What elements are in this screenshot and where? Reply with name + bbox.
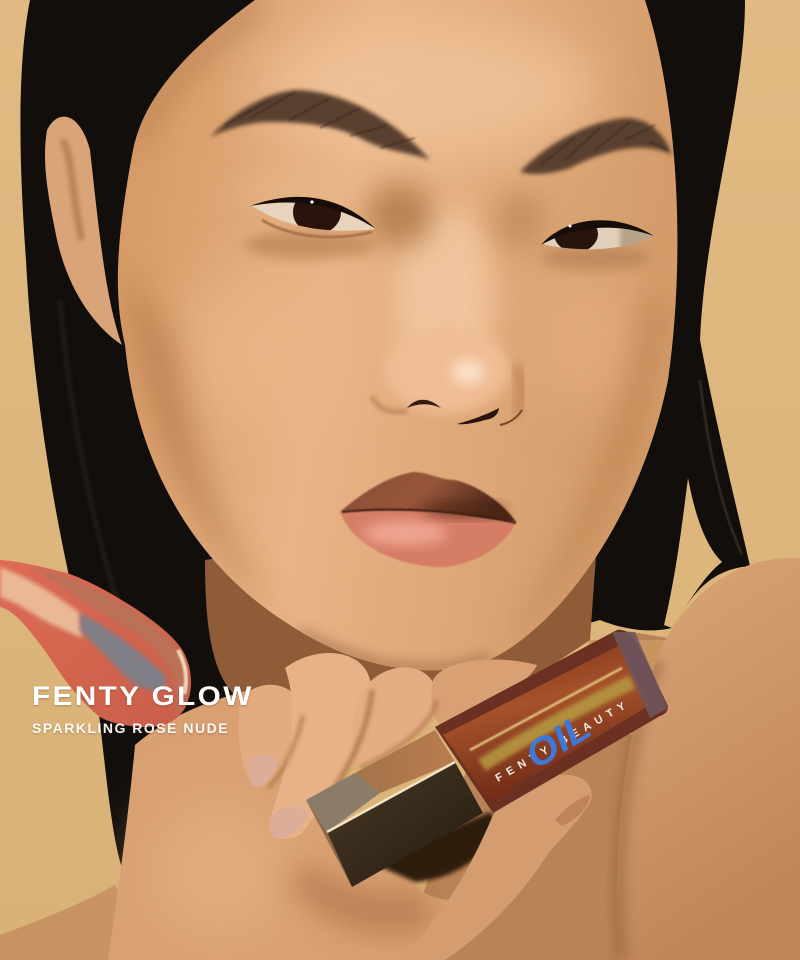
face bbox=[118, 0, 677, 670]
gloss tube bbox=[435, 630, 668, 813]
middle finger bbox=[352, 667, 437, 765]
neck bbox=[205, 500, 600, 700]
palm bbox=[108, 690, 500, 960]
tan gap beside hair strand bbox=[664, 478, 722, 628]
lips bbox=[340, 472, 516, 567]
cap dark front bbox=[327, 762, 483, 887]
hand bbox=[108, 653, 592, 960]
cap grey top bbox=[306, 773, 380, 832]
shoulder and chest bbox=[0, 558, 800, 960]
thumb bbox=[400, 775, 592, 960]
swatch bbox=[0, 560, 191, 727]
index finger bbox=[270, 653, 371, 839]
eyebrow: left bbox=[210, 90, 430, 160]
eye: left bbox=[250, 196, 376, 239]
finger with nail at lower left bbox=[239, 685, 303, 788]
eyebrow: right bbox=[520, 118, 672, 174]
nose bbox=[372, 328, 522, 425]
blue logo mark: OIL bbox=[519, 706, 598, 778]
cap copper top bbox=[355, 730, 455, 793]
ring finger bbox=[431, 660, 537, 725]
lip gloss product bbox=[306, 630, 668, 887]
eye: right bbox=[541, 220, 654, 250]
ear bbox=[45, 117, 122, 345]
shade description: SPARKLING ROSE NUDE bbox=[32, 720, 229, 736]
left nostril bbox=[407, 400, 441, 408]
shadow under tube bbox=[370, 812, 505, 882]
right nostril bbox=[457, 408, 499, 424]
tube logo: FENTY BEAUTY bbox=[494, 697, 633, 785]
cap left edge bbox=[306, 800, 352, 887]
shade name: FENTY GLOW bbox=[32, 681, 254, 711]
